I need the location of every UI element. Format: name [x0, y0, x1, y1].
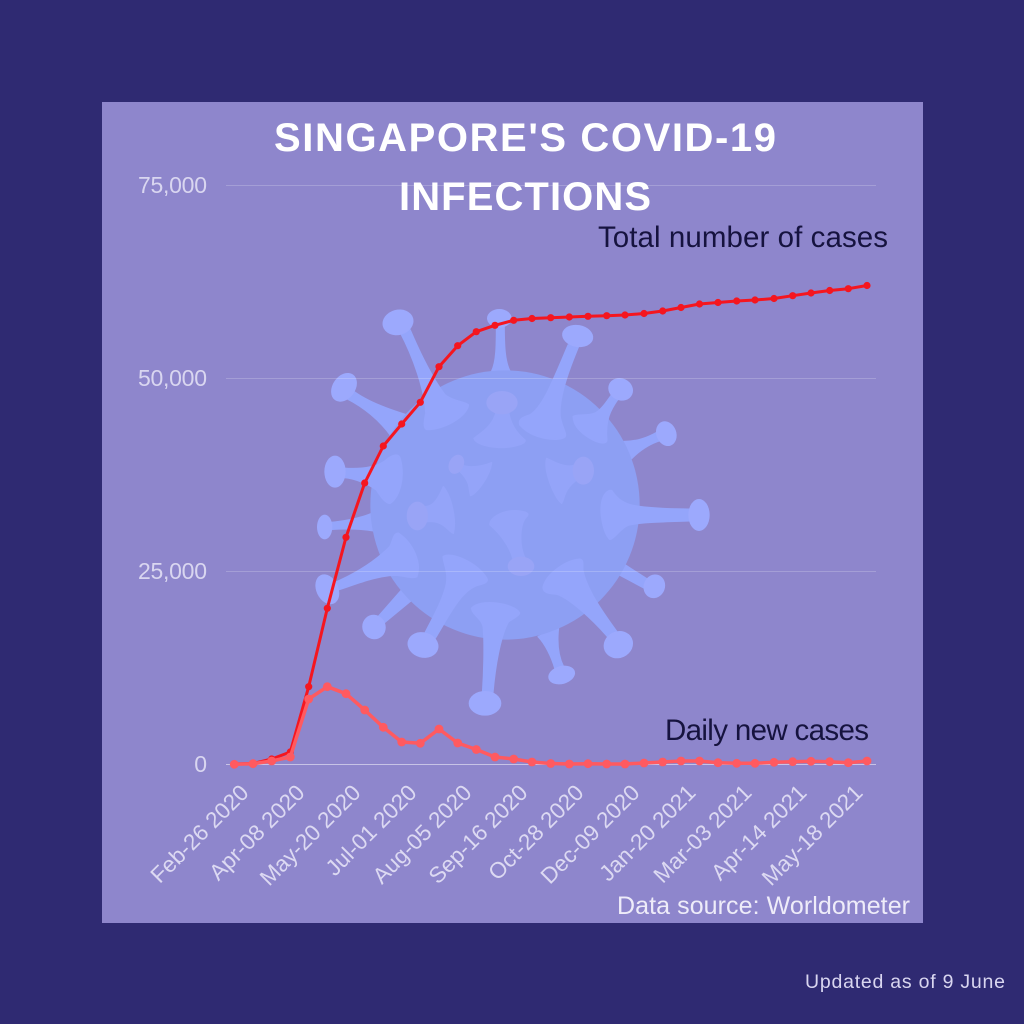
line: total number of cases	[234, 286, 867, 764]
title: INFECTIONS	[399, 175, 651, 219]
x axis date labels: Aug-05 2020	[368, 780, 477, 889]
title	[274, 116, 776, 219]
title: SINGAPORE'S COVID-19	[274, 116, 776, 160]
x axis date labels: May-20 2020	[255, 780, 366, 890]
y axis labels: 25,000	[138, 558, 207, 584]
update note: Updated as of 9 June	[805, 971, 1005, 993]
y axis labels: 0	[194, 751, 207, 777]
y axis labels: 50,000	[138, 365, 207, 391]
label: daily new cases: Daily new cases	[665, 714, 869, 747]
icon: coronavirus illustration	[311, 306, 710, 716]
x axis date labels: Oct-28 2020	[483, 780, 589, 885]
data source note: Data source: Worldometer	[617, 892, 910, 920]
line: daily new cases	[234, 687, 867, 764]
y axis labels: 75,000	[138, 172, 207, 198]
x axis date labels: Jul-01 2020	[321, 780, 422, 881]
x axis date labels: Apr-08 2020	[204, 780, 310, 885]
x axis date labels: Feb-26 2020	[146, 780, 254, 888]
x axis date labels: Dec-09 2020	[536, 780, 645, 889]
x axis date labels	[146, 780, 868, 890]
y axis grid lines	[226, 186, 876, 764]
x axis date labels: Sep-16 2020	[424, 780, 533, 889]
x axis date labels: May-18 2021	[757, 780, 868, 890]
panel: chart card	[102, 102, 923, 923]
label: total number of cases: Total number of cases	[598, 221, 888, 254]
x axis date labels: Mar-03 2021	[649, 780, 757, 888]
x axis date labels: Apr-14 2021	[706, 780, 812, 885]
y axis labels	[138, 172, 207, 777]
x axis date labels: Jan-20 2021	[594, 780, 701, 886]
